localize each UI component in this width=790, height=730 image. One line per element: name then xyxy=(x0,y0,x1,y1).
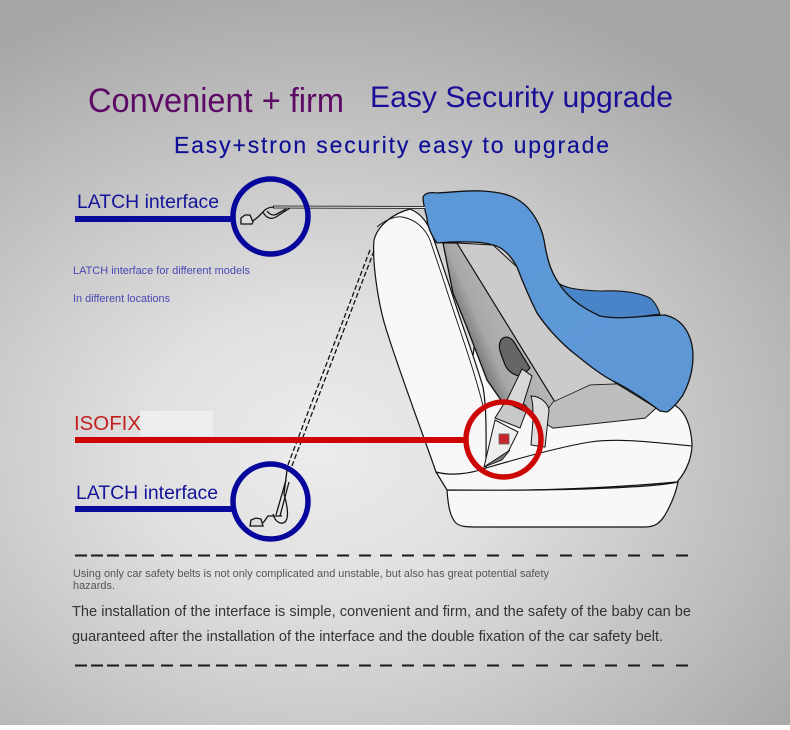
side note: locations: In different locations xyxy=(73,293,170,305)
circle xyxy=(466,402,541,477)
lower grey panel xyxy=(540,384,656,428)
main description text: The installation of the interface is simple, convenient and firm, and the safety of the baby can be xyxy=(72,603,691,620)
child seat light shell xyxy=(457,243,617,402)
belt slot xyxy=(499,337,530,376)
callout: isofix xyxy=(74,402,541,477)
callout: top latch xyxy=(75,179,308,254)
small warning text: hazards. xyxy=(73,580,115,592)
rear blue cushion xyxy=(553,278,660,322)
label: ISOFIX xyxy=(74,413,141,435)
leader line xyxy=(75,506,235,512)
side note: latch: LATCH interface for different models xyxy=(73,265,250,277)
small warning text: Using only car safety belts is not only complicated and unstable, but also has great potential safety xyxy=(73,568,549,580)
white smudge xyxy=(140,411,213,436)
child seat grey base xyxy=(443,243,656,428)
label: LATCH interface xyxy=(76,483,218,504)
main description text: guaranteed after the installation of the interface and the double fixation of the car safety belt. xyxy=(72,628,663,645)
blue shell xyxy=(423,191,693,412)
circle xyxy=(233,179,308,254)
callout: bottom latch xyxy=(75,464,308,539)
title: convenient + firm: Convenient + firm xyxy=(88,82,344,120)
vehicle seat back xyxy=(374,209,486,474)
vehicle seat cushion upper xyxy=(436,300,692,491)
dashed divider bottom xyxy=(75,664,688,666)
subtitle: Easy+stron security easy to upgrade xyxy=(174,132,609,158)
title: easy security upgrade: Easy Security upgrade xyxy=(370,81,673,114)
label: LATCH interface xyxy=(77,192,219,213)
lower tether dashed xyxy=(286,250,374,471)
latch hook xyxy=(241,207,290,224)
circle xyxy=(233,464,308,539)
red button xyxy=(499,434,509,444)
leader line xyxy=(75,216,235,222)
isofix connector and strap xyxy=(484,369,549,467)
top tether xyxy=(273,206,425,209)
leader line xyxy=(75,437,467,443)
dashed divider top xyxy=(75,554,688,556)
illustration: car seat xyxy=(374,191,693,527)
vehicle seat cushion lower xyxy=(447,482,678,527)
latch hook xyxy=(250,470,289,526)
